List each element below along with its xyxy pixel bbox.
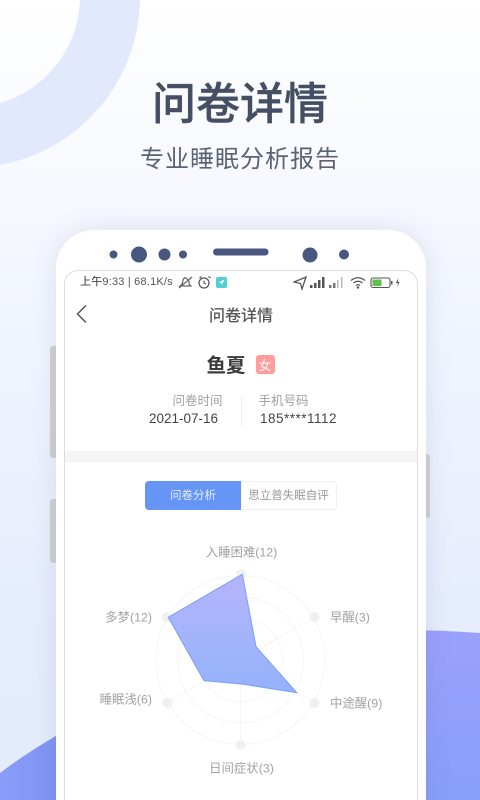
radar chart	[100, 546, 382, 776]
section separator	[65, 451, 417, 462]
side button: right	[425, 454, 430, 518]
gender tag: 女	[259, 355, 271, 374]
phone number: 185****1112	[260, 411, 337, 426]
radar axis labels: 入睡困难(12)	[206, 546, 277, 560]
survey time label: 问卷时间	[172, 390, 223, 409]
radar axis labels: 多梦(12)	[105, 610, 152, 624]
status icons right	[293, 276, 400, 291]
survey date: 2021-07-16	[149, 411, 218, 426]
status icons left	[178, 276, 227, 289]
radar axis labels: 早醒(3)	[330, 610, 370, 624]
radar axis labels	[100, 546, 382, 776]
status bar time and speed: 上午9:33 | 68.1K/s	[80, 276, 173, 288]
radar axis dots	[162, 569, 320, 750]
side button: left lower	[50, 499, 57, 563]
user name: 鱼夏	[206, 349, 246, 378]
active tab: 问卷分析	[170, 487, 216, 503]
radar grid	[156, 575, 325, 745]
phone number label: 手机号码	[258, 390, 309, 409]
inactive tab	[241, 481, 337, 510]
active tab	[145, 481, 241, 510]
inactive tab: 思立普失眠自评	[248, 487, 329, 503]
phone screen	[64, 270, 418, 800]
screen title: 问卷详情	[209, 302, 273, 326]
title: 问卷详情	[152, 68, 328, 132]
phone mockup	[56, 230, 426, 800]
radar axis labels: 睡眠浅(6)	[100, 692, 152, 706]
phone sensors and speaker	[110, 246, 349, 262]
gender tag	[256, 355, 274, 374]
side button: left upper	[50, 346, 57, 458]
tab switch	[145, 481, 337, 510]
radar axis labels: 中途醒(9)	[330, 696, 382, 710]
radar data polygon	[168, 574, 297, 693]
info divider	[240, 396, 242, 426]
back arrow	[76, 305, 86, 323]
radar axis labels: 日间症状(3)	[209, 760, 274, 776]
subtitle: 专业睡眠分析报告	[140, 139, 340, 174]
